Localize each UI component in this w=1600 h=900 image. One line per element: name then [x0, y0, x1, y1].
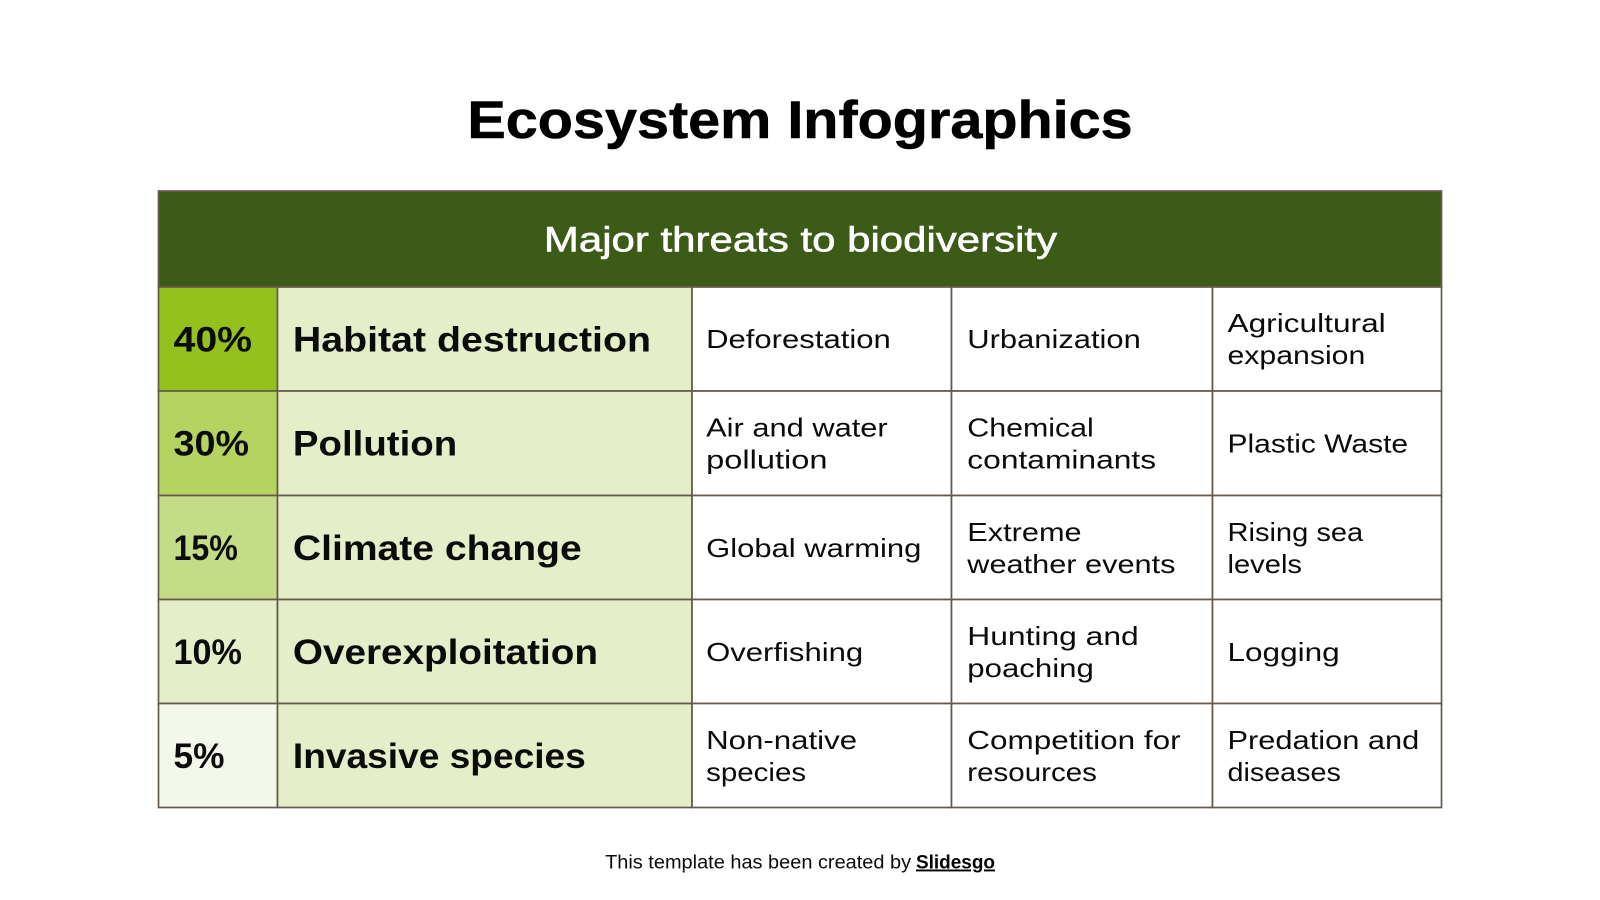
row: overexploitation 10%: Hunting and — [967, 621, 1139, 651]
row: climate change 15%: Global warming — [706, 533, 921, 563]
row: invasive species 5%: species — [706, 757, 806, 787]
row: pollution 30%: Plastic Waste — [1228, 428, 1408, 458]
row: overexploitation 10%: Overexploitation — [293, 633, 598, 672]
row: climate change 15%: Rising sea — [1228, 517, 1364, 547]
row: pollution 30%: contaminants — [967, 444, 1156, 474]
row: pollution 30%: 30% — [174, 424, 249, 464]
table header: Major threats to biodiversity — [544, 221, 1058, 260]
table: major threats to biodiversity — [158, 191, 1442, 808]
row: climate change 15%: 15% — [174, 529, 238, 568]
row: pollution 30%: Chemical — [967, 412, 1094, 442]
row: habitat destruction 40%: Urbanization — [967, 324, 1141, 354]
row: pollution 30%: pollution — [706, 444, 828, 474]
row: climate change 15%: weather events — [966, 549, 1176, 579]
row: invasive species 5%: Invasive species — [293, 737, 586, 776]
row: invasive species 5%: resources — [967, 757, 1097, 787]
row: climate change 15%: Climate change — [293, 529, 582, 568]
row: overexploitation 10%: poaching — [967, 653, 1094, 683]
row: overexploitation 10%: Overfishing — [706, 637, 863, 667]
row: pollution 30% — [158, 391, 1442, 496]
row: pollution 30%: Air and water — [706, 412, 888, 442]
row: invasive species 5%: 5% — [174, 737, 224, 776]
row: pollution 30%: Pollution — [293, 424, 457, 464]
row: habitat destruction 40%: Agricultural — [1228, 308, 1386, 338]
row: overexploitation 10% — [158, 600, 1442, 704]
row: habitat destruction 40%: Deforestation — [706, 324, 891, 354]
row: overexploitation 10%: 10% — [174, 633, 242, 672]
footer credit: Slidesgo — [916, 852, 995, 874]
row: habitat destruction 40%: Habitat destruction — [293, 320, 651, 359]
footer credit: This template has been created by — [605, 852, 912, 874]
row: climate change 15%: levels — [1228, 549, 1302, 579]
row: invasive species 5% — [158, 704, 1442, 808]
table header — [158, 191, 1442, 287]
row: habitat destruction 40%: expansion — [1228, 340, 1365, 370]
row: invasive species 5%: diseases — [1228, 757, 1341, 787]
row: invasive species 5%: Predation and — [1228, 725, 1419, 755]
row: invasive species 5%: Non-native — [706, 725, 857, 755]
row: overexploitation 10%: Logging — [1228, 637, 1340, 667]
row: invasive species 5%: Competition for — [967, 725, 1181, 755]
row: habitat destruction 40%: 40% — [174, 320, 252, 359]
row: habitat destruction 40% — [158, 287, 1442, 391]
row: climate change 15%: Extreme — [967, 517, 1082, 547]
title: Ecosystem Infographics — [467, 91, 1133, 150]
row: climate change 15% — [158, 496, 1442, 600]
